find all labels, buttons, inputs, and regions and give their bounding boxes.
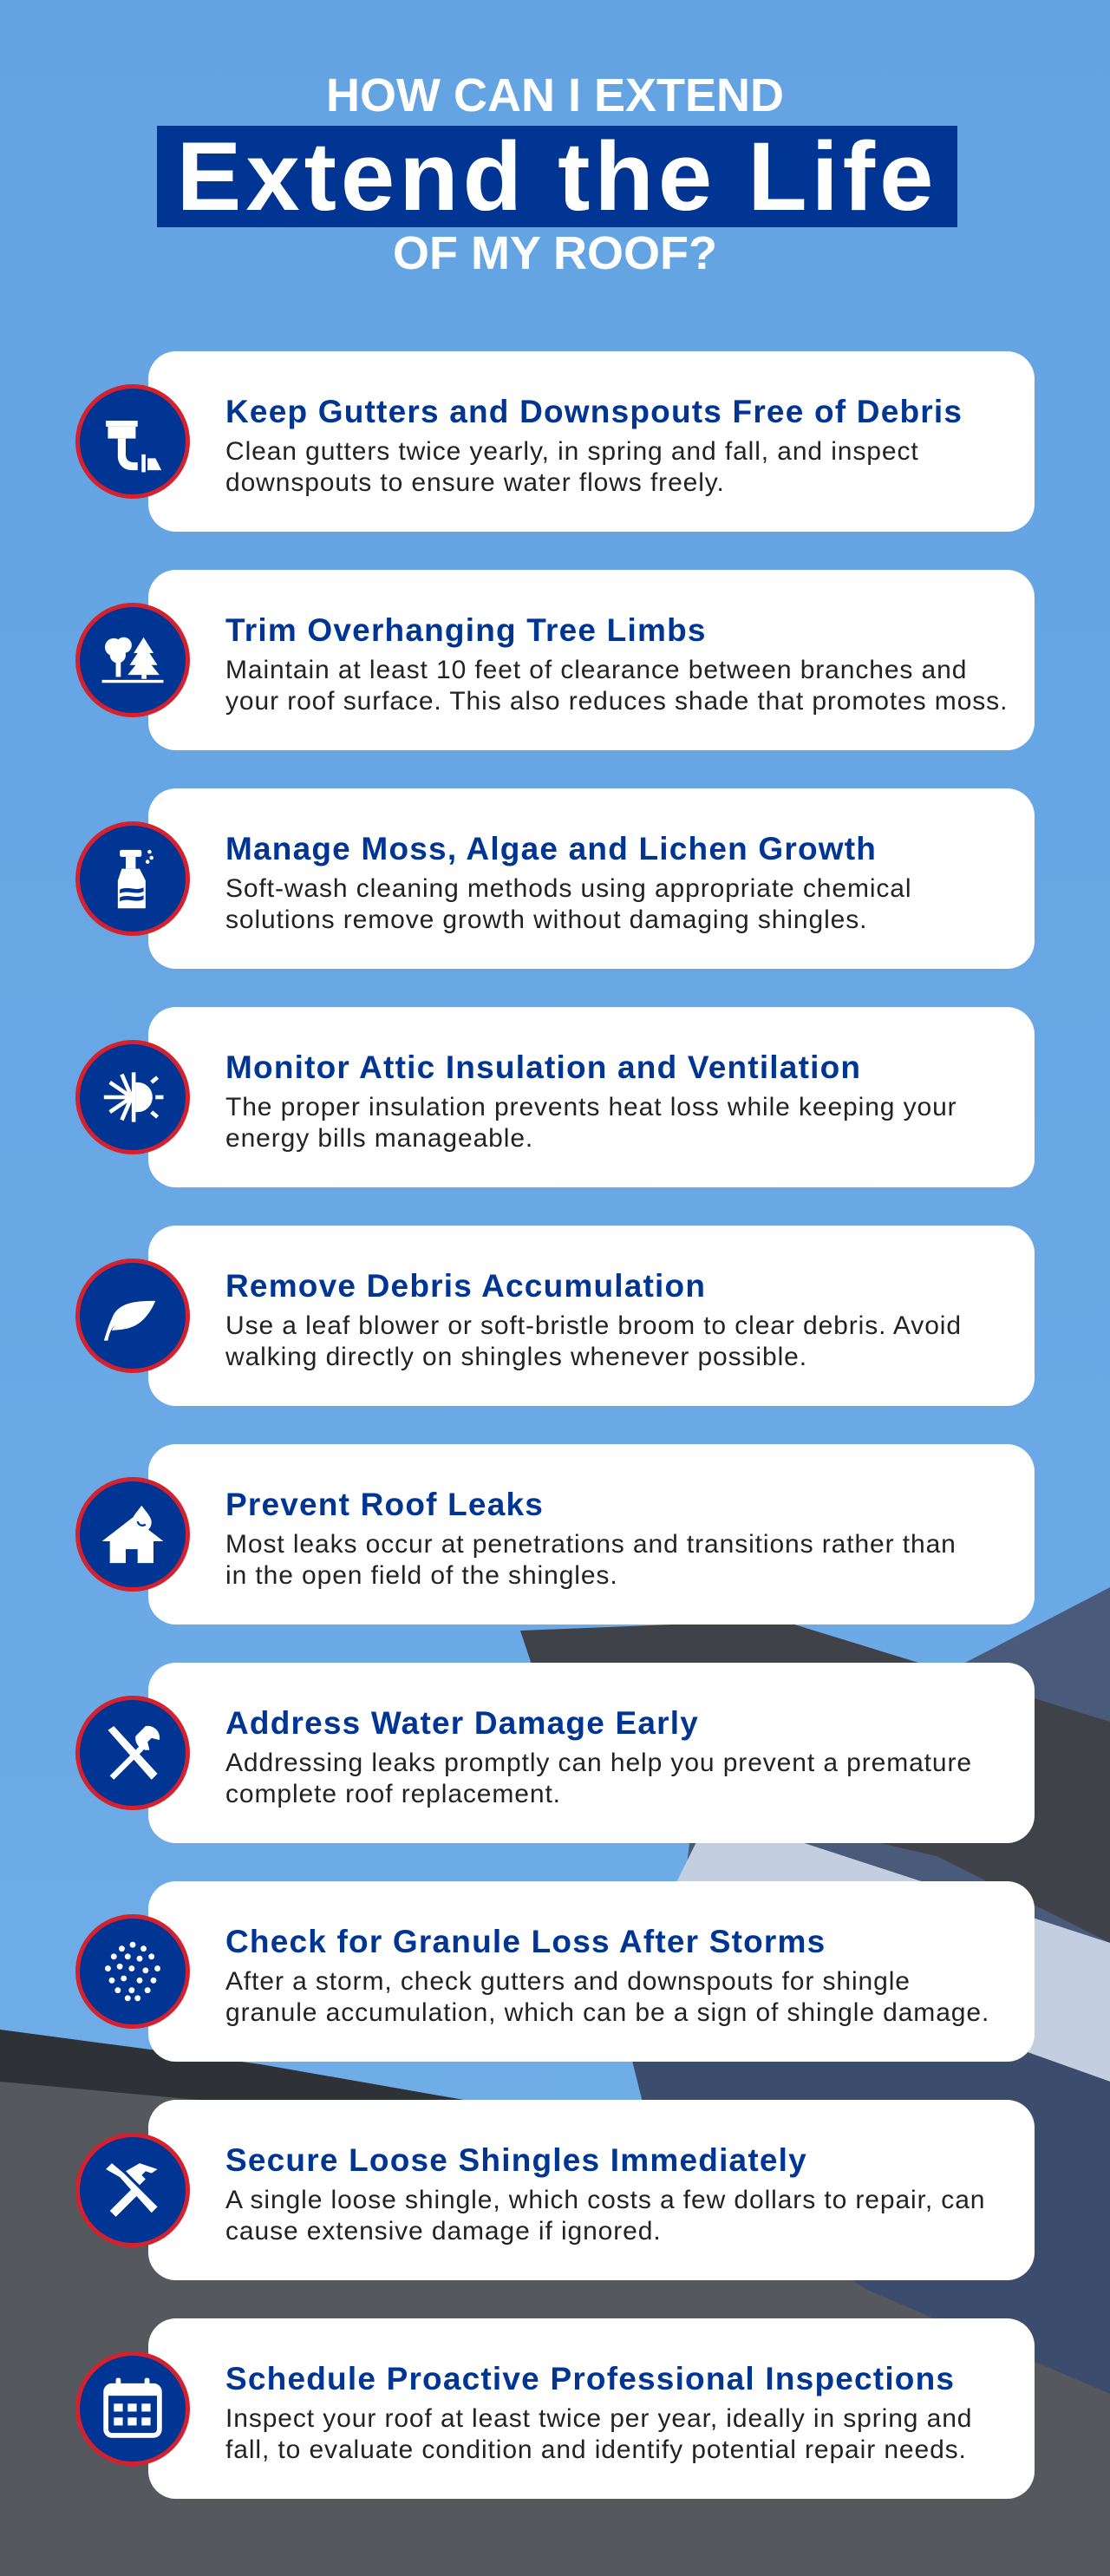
title highlight box: Extend the Life (177, 122, 937, 231)
card 6 (148, 1444, 1035, 1625)
card 1: Keep Gutters and Downspouts Free of Debris (225, 394, 963, 429)
card 8: Check for Granule Loss After Storms (225, 1924, 826, 1959)
card 4: Monitor Attic Insulation and Ventilation (225, 1049, 861, 1085)
icon: tools (75, 1696, 190, 1810)
card 8: After a storm, check gutters and downspouts for shingle (225, 1967, 911, 1996)
icon: granules (75, 1914, 190, 2029)
title line 1: HOW CAN I EXTEND (326, 69, 784, 121)
card 10: Schedule Proactive Professional Inspections (225, 2361, 955, 2396)
card 7 (148, 1663, 1035, 1843)
icon: trees (75, 603, 190, 717)
card 2: your roof surface. This also reduces shade that promotes moss. (225, 687, 1008, 716)
card 1: Clean gutters twice yearly, in spring and fall, and inspect (225, 437, 919, 466)
card 2: Maintain at least 10 feet of clearance between branches and (225, 656, 967, 684)
card 9: A single loose shingle, which costs a few dollars to repair, can (225, 2186, 985, 2214)
icon: snowflake sun (75, 1040, 190, 1154)
card 10 (148, 2318, 1035, 2499)
card 2: Trim Overhanging Tree Limbs (225, 612, 707, 648)
icon: hammer and screwdriver (75, 2133, 190, 2247)
card 7: Addressing leaks promptly can help you prevent a premature (225, 1749, 972, 1777)
card 3 (148, 788, 1035, 969)
icon: spray bottle (75, 821, 190, 936)
card 7: Address Water Damage Early (225, 1705, 699, 1741)
card 9 (148, 2100, 1035, 2280)
card 3: Soft-wash cleaning methods using appropriate chemical (225, 874, 911, 903)
card 6: in the open field of the shingles. (225, 1561, 618, 1590)
card 9: Secure Loose Shingles Immediately (225, 2142, 807, 2178)
card 2 (148, 570, 1035, 750)
title line 3: OF MY ROOF? (393, 227, 717, 279)
icon: gutter (75, 384, 190, 499)
card 5: Use a leaf blower or soft-bristle broom to clear debris. Avoid (225, 1311, 962, 1340)
card 4: energy bills manageable. (225, 1124, 533, 1153)
card 5: walking directly on shingles whenever possible. (225, 1343, 807, 1371)
card 1: downspouts to ensure water flows freely. (225, 468, 725, 497)
card 10: fall, to evaluate condition and identify potential repair needs. (225, 2435, 967, 2464)
card 4: The proper insulation prevents heat loss while keeping your (225, 1093, 957, 1121)
card 8 (148, 1881, 1035, 2062)
card 6: Most leaks occur at penetrations and transitions rather than (225, 1530, 957, 1559)
icon: calendar (75, 2351, 190, 2466)
card 9: cause extensive damage if ignored. (225, 2217, 662, 2246)
card 8: granule accumulation, which can be a sign of shingle damage. (225, 1998, 989, 2027)
card 3: solutions remove growth without damaging shingles. (225, 906, 867, 934)
card 5: Remove Debris Accumulation (225, 1268, 706, 1304)
card 3: Manage Moss, Algae and Lichen Growth (225, 831, 877, 866)
icon: house with drop (75, 1477, 190, 1592)
icon: leaf (75, 1259, 190, 1373)
card 5 (148, 1226, 1035, 1406)
card 4 (148, 1007, 1035, 1187)
card 1 (148, 351, 1035, 532)
card 10: Inspect your roof at least twice per year, ideally in spring and (225, 2404, 972, 2433)
card 7: complete roof replacement. (225, 1780, 561, 1808)
card 6: Prevent Roof Leaks (225, 1487, 544, 1522)
